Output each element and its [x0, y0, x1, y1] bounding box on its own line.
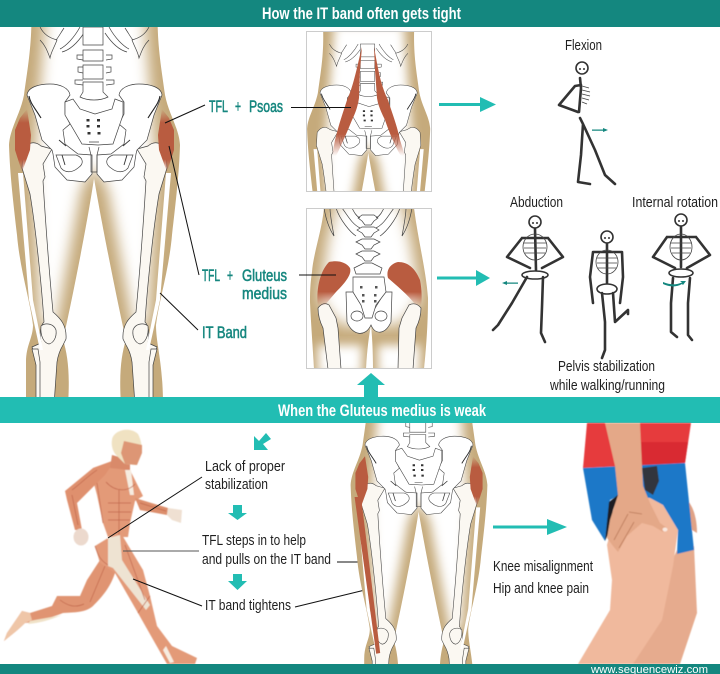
label: IT Band: IT Band — [202, 323, 247, 342]
panel: gluteus medius — [306, 200, 432, 375]
label: TFL + Psoas: Psoas — [249, 97, 283, 116]
text: lack of proper stabilization: stabilization — [205, 476, 268, 493]
text: IT band tightens: IT band tightens — [205, 597, 291, 614]
text: lack of proper stabilization — [108, 458, 285, 538]
text: TFL steps in: TFL steps in to help — [202, 532, 306, 549]
label: pelvis stabilization — [549, 358, 665, 394]
label: TFL + Gluteus medius: medius — [242, 284, 287, 303]
label: TFL + Psoas: + — [235, 97, 241, 116]
top header band — [0, 0, 720, 27]
arrow: down 2 — [228, 574, 247, 590]
text: symptoms — [493, 558, 594, 597]
text: lack of proper stabilization: Lack of proper — [205, 458, 285, 475]
label: pelvis stabilization: while walking/running — [549, 377, 665, 394]
label: TFL + Gluteus medius — [169, 146, 336, 303]
text: symptoms: Knee misalignment — [493, 558, 594, 575]
text: symptoms: Hip and knee pain — [493, 580, 589, 597]
label: Flexion: Flexion — [565, 37, 602, 54]
header text: How the IT band often gets tight — [262, 4, 461, 23]
skeleton: flexion — [559, 62, 615, 184]
motion arrow — [502, 281, 518, 285]
label: TFL + Gluteus medius: Gluteus — [242, 266, 287, 285]
arrow: down 1 — [228, 505, 247, 520]
band heading: When the Gluteus medius is weak — [278, 401, 486, 420]
arrow: psoas to flexion — [439, 97, 496, 112]
motion arrow — [663, 281, 686, 286]
label: TFL + Psoas: TFL — [209, 97, 228, 116]
middle band — [0, 397, 720, 423]
label: Abduction: Abduction — [510, 194, 563, 211]
arrow: diagonal down-left — [254, 433, 271, 450]
text: TFL steps in: and pulls on the IT band — [202, 551, 331, 568]
skeleton: internal rotation — [653, 214, 710, 340]
text: IT band tightens — [133, 579, 365, 614]
arrow: gluteus to skeletons — [437, 270, 490, 286]
label: TFL + Psoas — [165, 97, 351, 123]
illustration: large hip and thigh anatomy — [9, 27, 180, 397]
footer band — [0, 664, 720, 674]
image: running muscular figure — [4, 430, 197, 664]
label: IT Band — [160, 293, 247, 342]
image: runner holding thigh — [578, 423, 697, 664]
label: TFL + Gluteus medius: TFL — [202, 266, 220, 285]
text: TFL steps in — [123, 532, 360, 568]
motion arrow — [592, 128, 608, 132]
arrow: up to gluteus panel — [357, 373, 385, 397]
skeleton: pelvis stabilization — [590, 231, 628, 358]
panel: psoas muscle — [306, 25, 432, 316]
label: pelvis stabilization: Pelvis stabilization — [558, 358, 655, 375]
arrow: hips to pain photo — [493, 519, 567, 535]
label: TFL + Gluteus medius: + — [227, 266, 233, 285]
skeleton: abduction — [493, 216, 563, 342]
illustration: hips with tight IT band — [350, 423, 488, 664]
